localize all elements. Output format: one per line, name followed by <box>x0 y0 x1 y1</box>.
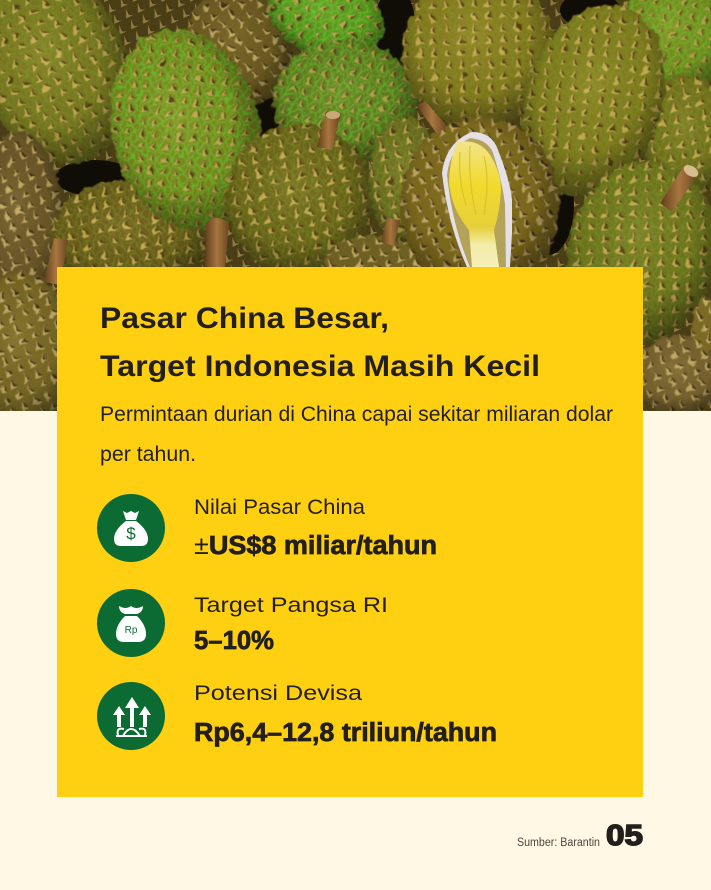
title: Target Indonesia Masih Kecil <box>100 350 540 383</box>
stat: Potensi Devisa <box>97 681 497 750</box>
icon: rupiah money bag: Rp <box>125 625 138 636</box>
icon: growth arrows with gear <box>97 682 165 750</box>
value: 5–10% <box>194 627 274 655</box>
durian stems <box>44 101 700 285</box>
description <box>100 403 613 466</box>
label: Nilai Pasar China <box>194 495 365 519</box>
photo: pile of durians <box>0 0 711 428</box>
label: Target Pangsa RI <box>194 593 388 617</box>
value: Rp6,4–12,8 triliun/tahun <box>194 719 497 747</box>
icon: dollar money bag <box>97 494 165 562</box>
dark gaps between fruits <box>55 0 655 255</box>
stat: Target Pangsa RI <box>97 589 388 657</box>
durian fruit cluster <box>0 0 711 428</box>
title: Pasar China Besar, <box>100 302 389 335</box>
yellow content panel <box>57 267 643 797</box>
description: Permintaan durian di China capai sekitar miliaran dolar <box>100 403 613 426</box>
page number: 05 <box>606 820 643 852</box>
source: Sumber: Barantin <box>517 837 600 849</box>
source note and page number <box>517 820 643 852</box>
stat: Nilai Pasar China <box>97 494 437 562</box>
opened durian flesh <box>442 132 512 267</box>
value: ±US$8 miliar/tahun <box>194 532 437 560</box>
icon: dollar money bag: $ <box>126 524 136 543</box>
description: per tahun. <box>100 443 196 466</box>
icon: rupiah money bag <box>97 589 165 657</box>
title <box>100 302 540 383</box>
label: Potensi Devisa <box>194 681 362 705</box>
